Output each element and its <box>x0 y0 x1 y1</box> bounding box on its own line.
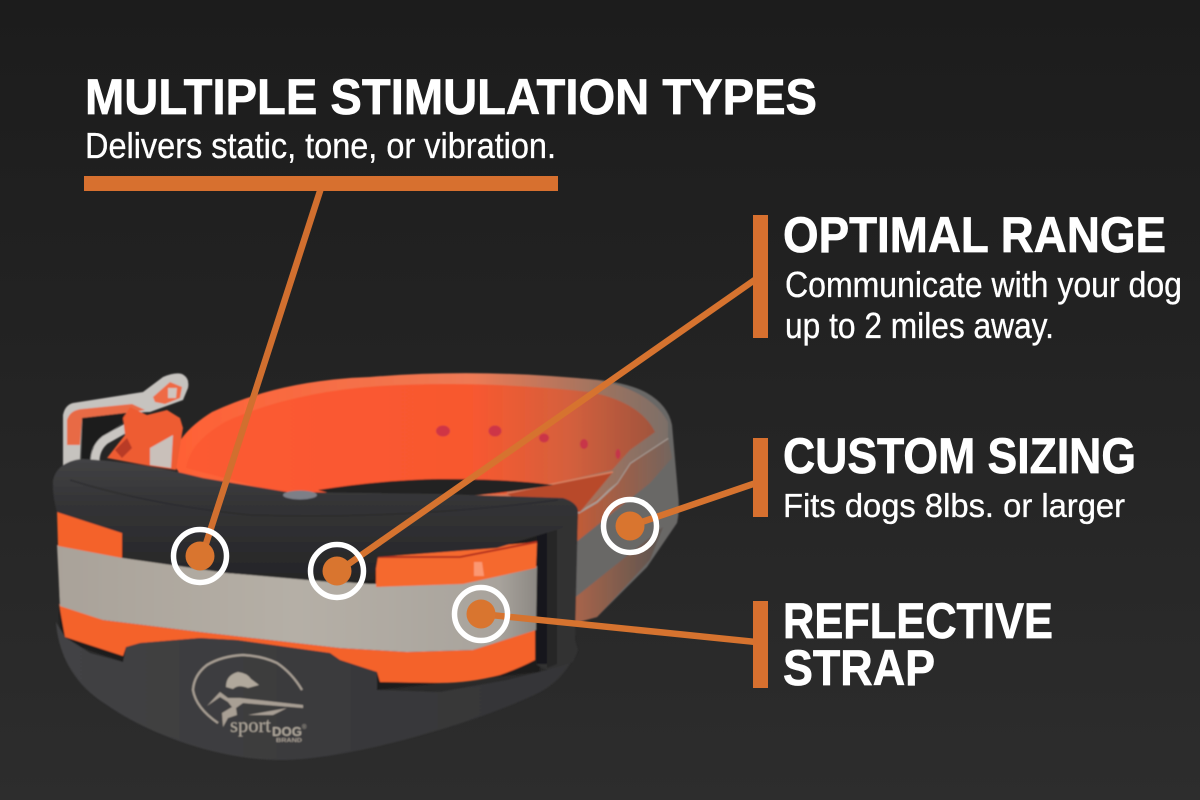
metal buckle <box>63 373 188 470</box>
body text: Fits dogs 8lbs. or larger <box>783 487 1125 524</box>
callout: multiple stimulation types <box>84 69 817 582</box>
marker <box>310 544 364 598</box>
dark opening above housing <box>318 479 553 497</box>
lower orange band <box>59 604 535 683</box>
body text: Delivers static, tone, or vibration. <box>85 125 556 166</box>
leader line <box>203 188 321 553</box>
sportDOG logo: sport <box>230 713 271 737</box>
bar <box>753 438 768 517</box>
right pillar <box>537 510 578 670</box>
callout: reflective strap <box>454 588 1053 696</box>
marker <box>604 500 656 552</box>
heading <box>783 593 1053 696</box>
upper orange band right <box>376 542 537 587</box>
leader line <box>340 279 756 570</box>
marker <box>174 530 226 582</box>
sportDOG logo: DOG <box>272 724 302 739</box>
body line 2: up to 2 miles away. <box>785 305 1054 346</box>
strap holes <box>436 426 620 459</box>
heading: CUSTOM SIZING <box>783 428 1136 484</box>
back strap outer grey band <box>560 378 679 625</box>
sportDOG logo: BRAND <box>276 738 303 744</box>
housing top ridge <box>70 480 558 516</box>
callout: optimal range <box>310 207 1182 598</box>
dark base behind bands <box>57 505 540 690</box>
sportDOG logo <box>193 655 307 744</box>
reflective band <box>57 545 537 652</box>
heading: OPTIMAL RANGE <box>783 207 1166 263</box>
collar product photo <box>53 373 679 760</box>
back strap orange interior <box>172 373 668 512</box>
marker <box>454 588 508 640</box>
indicator light <box>283 490 317 500</box>
heading: REFLECTIVE <box>783 593 1053 649</box>
sportDOG logo: ® <box>302 724 307 731</box>
leader line <box>630 483 756 526</box>
upper orange band left <box>57 512 122 558</box>
heading: MULTIPLE STIMULATION TYPES <box>85 69 817 125</box>
bar <box>84 176 558 191</box>
heading: STRAP <box>783 640 935 696</box>
lower housing <box>56 622 577 760</box>
leader line <box>481 614 756 642</box>
bar <box>753 215 768 338</box>
callout: custom sizing <box>604 428 1136 552</box>
top housing <box>53 459 578 582</box>
bar <box>753 601 768 688</box>
